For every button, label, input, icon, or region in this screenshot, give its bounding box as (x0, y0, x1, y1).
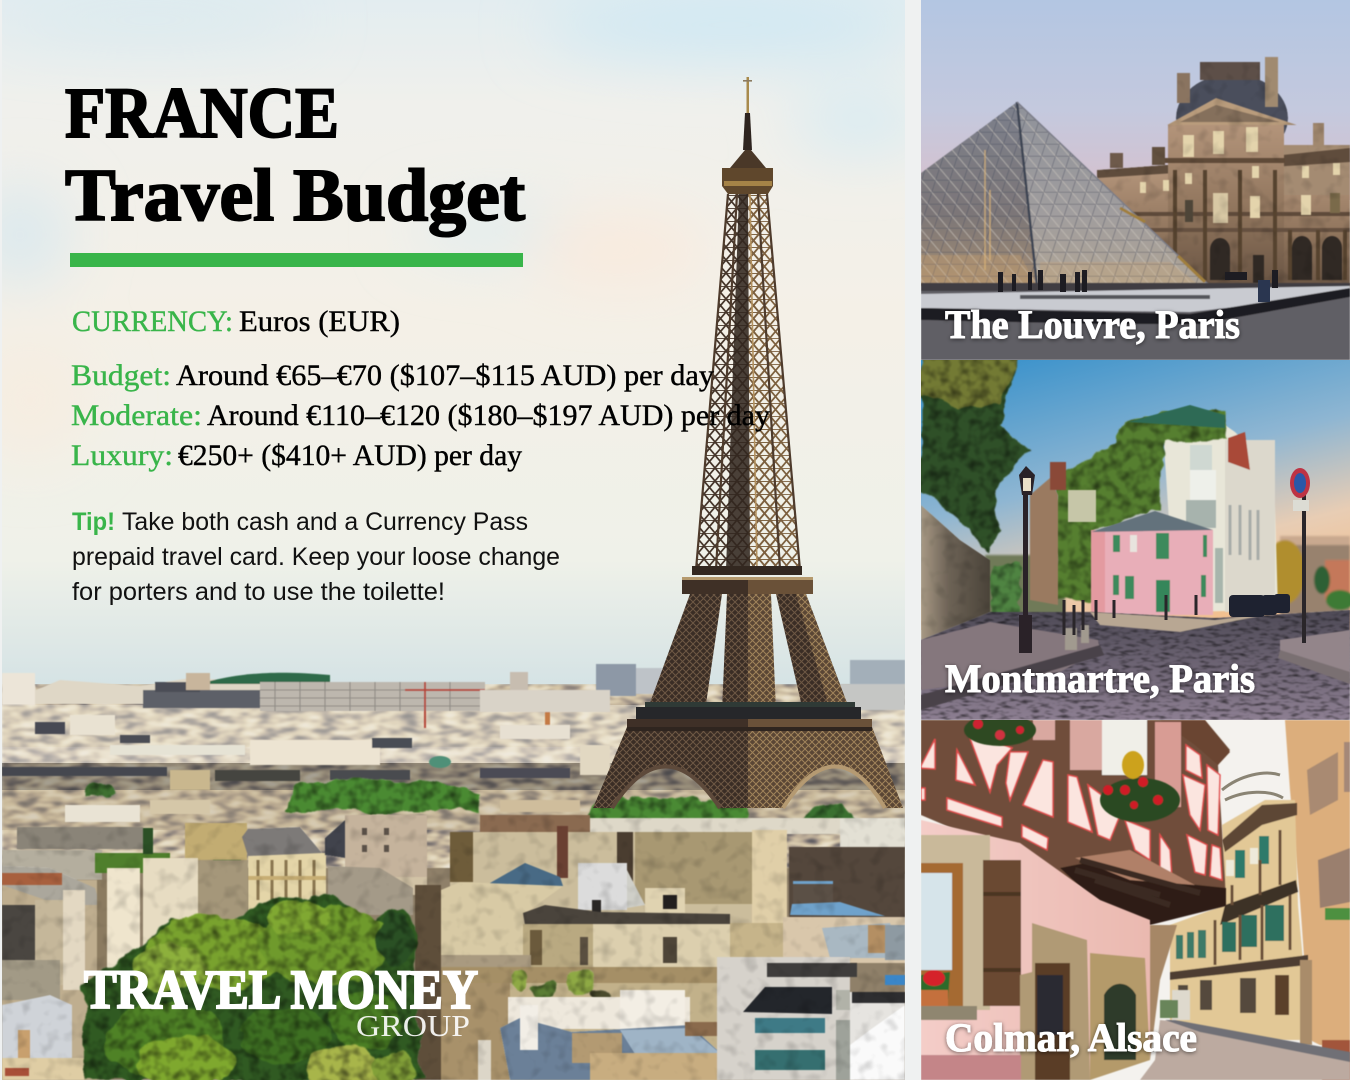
tower first platform and arches (593, 707, 903, 808)
tower upper shaft (692, 194, 802, 575)
left-centre blocks (17, 827, 143, 849)
plaza ground (921, 283, 1350, 360)
rooftop plants (511, 968, 612, 998)
no parking sign (1290, 468, 1310, 643)
caption: Montmartre, Paris: Montmartre, Paris (945, 656, 1255, 701)
tower spire and top (722, 77, 773, 194)
pavements and kerbs (921, 612, 1350, 710)
caption: Colmar, Alsace: Colmar, Alsace (945, 1015, 1197, 1060)
tip text: Take both cash and a Currency Pass (122, 508, 528, 536)
louvre arches (1210, 236, 1342, 283)
louvre palace (1097, 57, 1350, 288)
far city (2, 660, 905, 874)
left trees (921, 350, 1030, 620)
cobbled street (1140, 990, 1350, 1080)
budget tier: Budget: (71, 359, 171, 392)
panel: Paris skyline photo (0, 0, 930, 1080)
panel: Montmartre (921, 350, 1350, 720)
title line one: FRANCE (65, 73, 339, 153)
timbered facade (921, 720, 1230, 925)
tree canopy (84, 897, 425, 1080)
foreground rooftops right (500, 957, 905, 1080)
louvre sky (921, 0, 1350, 200)
icon: Eiffel Tower (593, 77, 903, 808)
logo wordmark: TRAVEL MONEY (84, 959, 478, 1020)
half-timber panels (921, 738, 1222, 880)
flower boxes (964, 714, 1180, 822)
moderate tier: Around €110–€120 ($180–$197 AUD) per day (207, 399, 770, 432)
currency line: CURRENCY: (72, 305, 233, 338)
mid city buildings (2, 815, 905, 1080)
tower second platform (682, 577, 813, 594)
caption: The Louvre, Paris: The Louvre, Paris (945, 302, 1240, 347)
large wall (450, 832, 752, 924)
trees behind the mid city (88, 779, 860, 825)
panel: The Louvre (921, 0, 1350, 360)
terrace and side details (1030, 405, 1225, 605)
tip text: for porters and to use the toilette! (72, 578, 445, 606)
logo: Travel Money Group (84, 970, 478, 1036)
luxury tier: Luxury: (71, 439, 173, 472)
tower legs (645, 594, 855, 711)
tip text: prepaid travel card. Keep your loose change (72, 543, 560, 571)
glass pyramid (921, 102, 1210, 286)
moderate tier: Moderate: (71, 399, 202, 432)
street (921, 610, 1350, 720)
street lamp (1019, 466, 1035, 653)
bare branches (1222, 773, 1283, 800)
cream block (490, 863, 563, 888)
cobbles (921, 610, 1350, 720)
distant view (985, 536, 1350, 620)
luxury tier: €250+ ($410+ AUD) per day (178, 439, 522, 472)
block accents (70, 715, 115, 735)
skyline landmarks (2, 660, 905, 822)
left foreground buildings (2, 858, 248, 1080)
pink lower wall (921, 820, 1177, 1080)
colmar backdrop (921, 720, 1350, 1080)
currency line (72, 305, 400, 338)
sky with soft clouds (0, 0, 930, 700)
right tan building (1285, 720, 1350, 1080)
mid right roofs (794, 884, 832, 904)
overhang shadow and joists (1060, 850, 1226, 925)
budget tier: Around €65–€70 ($107–$115 AUD) per day (176, 359, 714, 392)
louvre windows (1140, 127, 1340, 223)
cream building (1163, 418, 1278, 612)
parked cars (1229, 594, 1290, 617)
stone wall (921, 505, 990, 640)
middle timbered building (1170, 800, 1312, 1045)
bollards (1064, 595, 1196, 635)
budget levels (71, 359, 770, 472)
divider bar (70, 253, 523, 267)
tip text: Tip! (72, 508, 115, 536)
visitors silhouettes (998, 270, 1278, 302)
logo subline: GROUP (356, 1008, 470, 1043)
ivy wall (1055, 412, 1228, 600)
title line two: Travel Budget (65, 155, 525, 237)
montmartre sky (921, 360, 1350, 630)
panel: Colmar (921, 714, 1350, 1080)
currency line: Euros (EUR) (239, 305, 400, 338)
tip text (72, 508, 560, 606)
heading (65, 73, 525, 237)
pink house (1091, 511, 1213, 615)
shutters and window (1033, 720, 1181, 807)
